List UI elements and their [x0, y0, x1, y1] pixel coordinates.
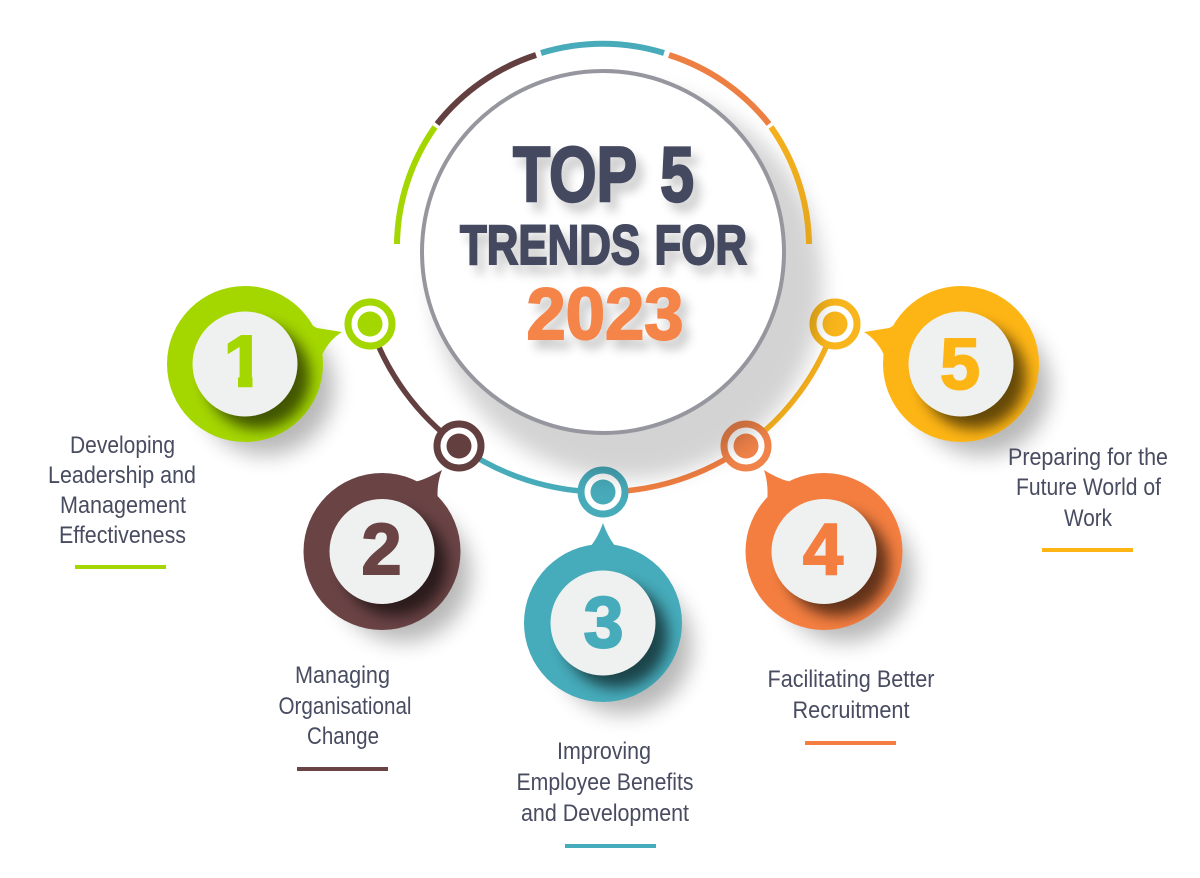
- label 1: Leadership and: [48, 462, 196, 489]
- badge 3: 3: [583, 583, 624, 663]
- label 3: Employee Benefits: [516, 769, 694, 796]
- node 3 ring: [581, 470, 625, 514]
- badge 2: 2: [361, 510, 402, 590]
- label 5: [1008, 444, 1168, 552]
- label 4: Recruitment: [792, 697, 910, 724]
- badge 4: [746, 470, 913, 642]
- top arc segments: [397, 44, 809, 244]
- badge 1: [167, 286, 342, 455]
- arc: yellow: [771, 127, 809, 244]
- node 5 ring: [813, 302, 857, 346]
- badge 4: 4: [803, 510, 843, 590]
- central circle shadow: [433, 89, 823, 479]
- label 2: [278, 662, 412, 771]
- lower connecting arc: [370, 324, 835, 492]
- label 1: [48, 432, 196, 569]
- arc: green: [397, 127, 435, 244]
- label 5: Work: [1064, 505, 1113, 532]
- label 3: and Development: [521, 800, 689, 827]
- badge 5: 5: [940, 325, 980, 405]
- label 2: Organisational: [278, 693, 412, 720]
- node 4 ring: [724, 424, 768, 468]
- badge 3: [524, 523, 692, 714]
- label 1: Effectiveness: [59, 522, 186, 549]
- arc: brown: [437, 55, 536, 124]
- title: [460, 130, 747, 355]
- central circle: [422, 71, 784, 433]
- label 3: Improving: [557, 738, 651, 765]
- badge 5: [864, 286, 1050, 455]
- label 1: Developing: [70, 432, 175, 459]
- label 3: [516, 738, 694, 848]
- connector: yellow: [746, 324, 835, 446]
- badge 2: [304, 470, 471, 642]
- label 5: Preparing for the: [1008, 444, 1168, 471]
- label 2: Change: [307, 723, 379, 750]
- connector: orange: [603, 446, 746, 492]
- arc: teal: [541, 44, 664, 53]
- label 5: Future World of: [1016, 474, 1161, 501]
- title line: 2023: 2023: [526, 274, 684, 355]
- title line: TOP 5: TOP 5: [513, 130, 694, 218]
- label 2: Managing: [295, 662, 390, 689]
- connector: brown: [370, 324, 459, 446]
- connector: teal: [459, 446, 603, 492]
- title line: TRENDS FOR: TRENDS FOR: [460, 213, 747, 276]
- label 4: Facilitating Better: [768, 666, 934, 693]
- arc: orange: [669, 55, 769, 124]
- label 1: Management: [60, 492, 186, 519]
- badge 1: 1: [224, 322, 264, 402]
- node 1 ring: [348, 302, 392, 346]
- label 4: [768, 666, 934, 745]
- node 2 ring: [437, 424, 481, 468]
